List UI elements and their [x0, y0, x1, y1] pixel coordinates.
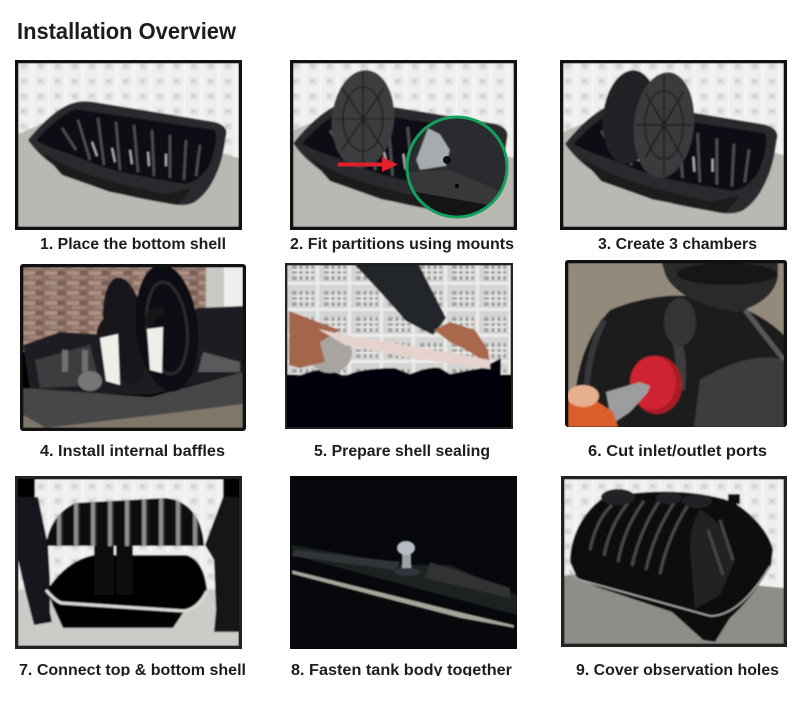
caption 6: 6. Cut inlet/outlet ports — [588, 443, 767, 460]
white building edge — [206, 267, 243, 317]
photo 8: bolt fastening — [290, 476, 517, 649]
bottom shell — [46, 555, 207, 628]
hand — [567, 385, 599, 407]
caption 4: 4. Install internal baffles — [40, 443, 225, 460]
neck funnel — [662, 263, 778, 312]
photo 9: finished tank with covered holes — [561, 476, 787, 647]
front rim of tub — [23, 372, 243, 428]
background floor — [568, 263, 784, 427]
front partition disc — [629, 69, 699, 181]
red hole saw — [630, 356, 682, 414]
floor — [564, 570, 784, 644]
black shell — [293, 101, 508, 214]
photo 4: internal baffles — [20, 264, 246, 431]
sealing tape — [318, 329, 490, 369]
caption 2: 2. Fit partitions using mounts — [290, 236, 514, 253]
photo 2: partition and mount detail — [290, 60, 517, 230]
title: Installation Overview — [17, 18, 236, 44]
photo 6: drilling ports — [565, 260, 787, 427]
rear partition disc — [598, 67, 662, 167]
crate wall background — [18, 63, 239, 163]
partition disc — [328, 67, 398, 171]
tank body — [574, 295, 784, 427]
black shell — [28, 101, 227, 205]
black tank top — [287, 358, 501, 427]
caption 3: 3. Create 3 chambers — [598, 236, 757, 253]
concrete floor — [18, 112, 239, 227]
drill body — [568, 397, 618, 427]
caption 1: 1. Place the bottom shell — [40, 236, 226, 253]
crates — [287, 265, 511, 375]
concrete floor — [563, 112, 784, 227]
caption 5: 5. Prepare shell sealing — [314, 443, 490, 460]
ground — [23, 400, 243, 428]
zoom detail circle — [405, 115, 510, 225]
person right — [205, 497, 239, 632]
drill chuck — [606, 382, 650, 424]
censored head left — [18, 479, 35, 497]
sealing disc — [308, 333, 352, 373]
concrete floor — [293, 112, 514, 227]
floor — [18, 590, 239, 646]
photo 7: joining top and bottom shell — [15, 476, 242, 649]
flange band — [292, 545, 517, 615]
baffle disc right — [129, 261, 205, 395]
observation hole covers — [601, 489, 740, 508]
caption 7: 7. Connect top & bottom shell — [19, 662, 246, 679]
caption 8: 8. Fasten tank body together — [291, 662, 512, 679]
black shell — [565, 102, 777, 213]
photo 3: three chambers — [560, 60, 787, 230]
photo 5: shell sealing tape — [285, 263, 513, 429]
brick wall — [23, 267, 208, 352]
person left — [18, 497, 52, 625]
central partitions — [94, 545, 114, 595]
right hand — [434, 322, 490, 366]
crate wall — [564, 479, 784, 589]
red arrow — [338, 157, 398, 172]
top shell — [46, 498, 204, 546]
white pipe left — [100, 318, 120, 385]
tub interior — [23, 306, 243, 395]
white pipe right — [147, 311, 164, 373]
left hand — [289, 311, 340, 368]
crate wall background — [563, 63, 784, 168]
baffle disc left — [97, 275, 153, 387]
jacket sleeve — [355, 265, 446, 335]
bolt — [394, 541, 420, 576]
crate wall — [18, 479, 239, 599]
caption 9: 9. Cover observation holes — [576, 662, 779, 679]
censored head right — [223, 479, 239, 497]
tank — [570, 492, 773, 642]
seal strip — [292, 570, 514, 628]
crate wall background — [293, 63, 514, 163]
photo 1: bottom shell — [15, 60, 242, 230]
